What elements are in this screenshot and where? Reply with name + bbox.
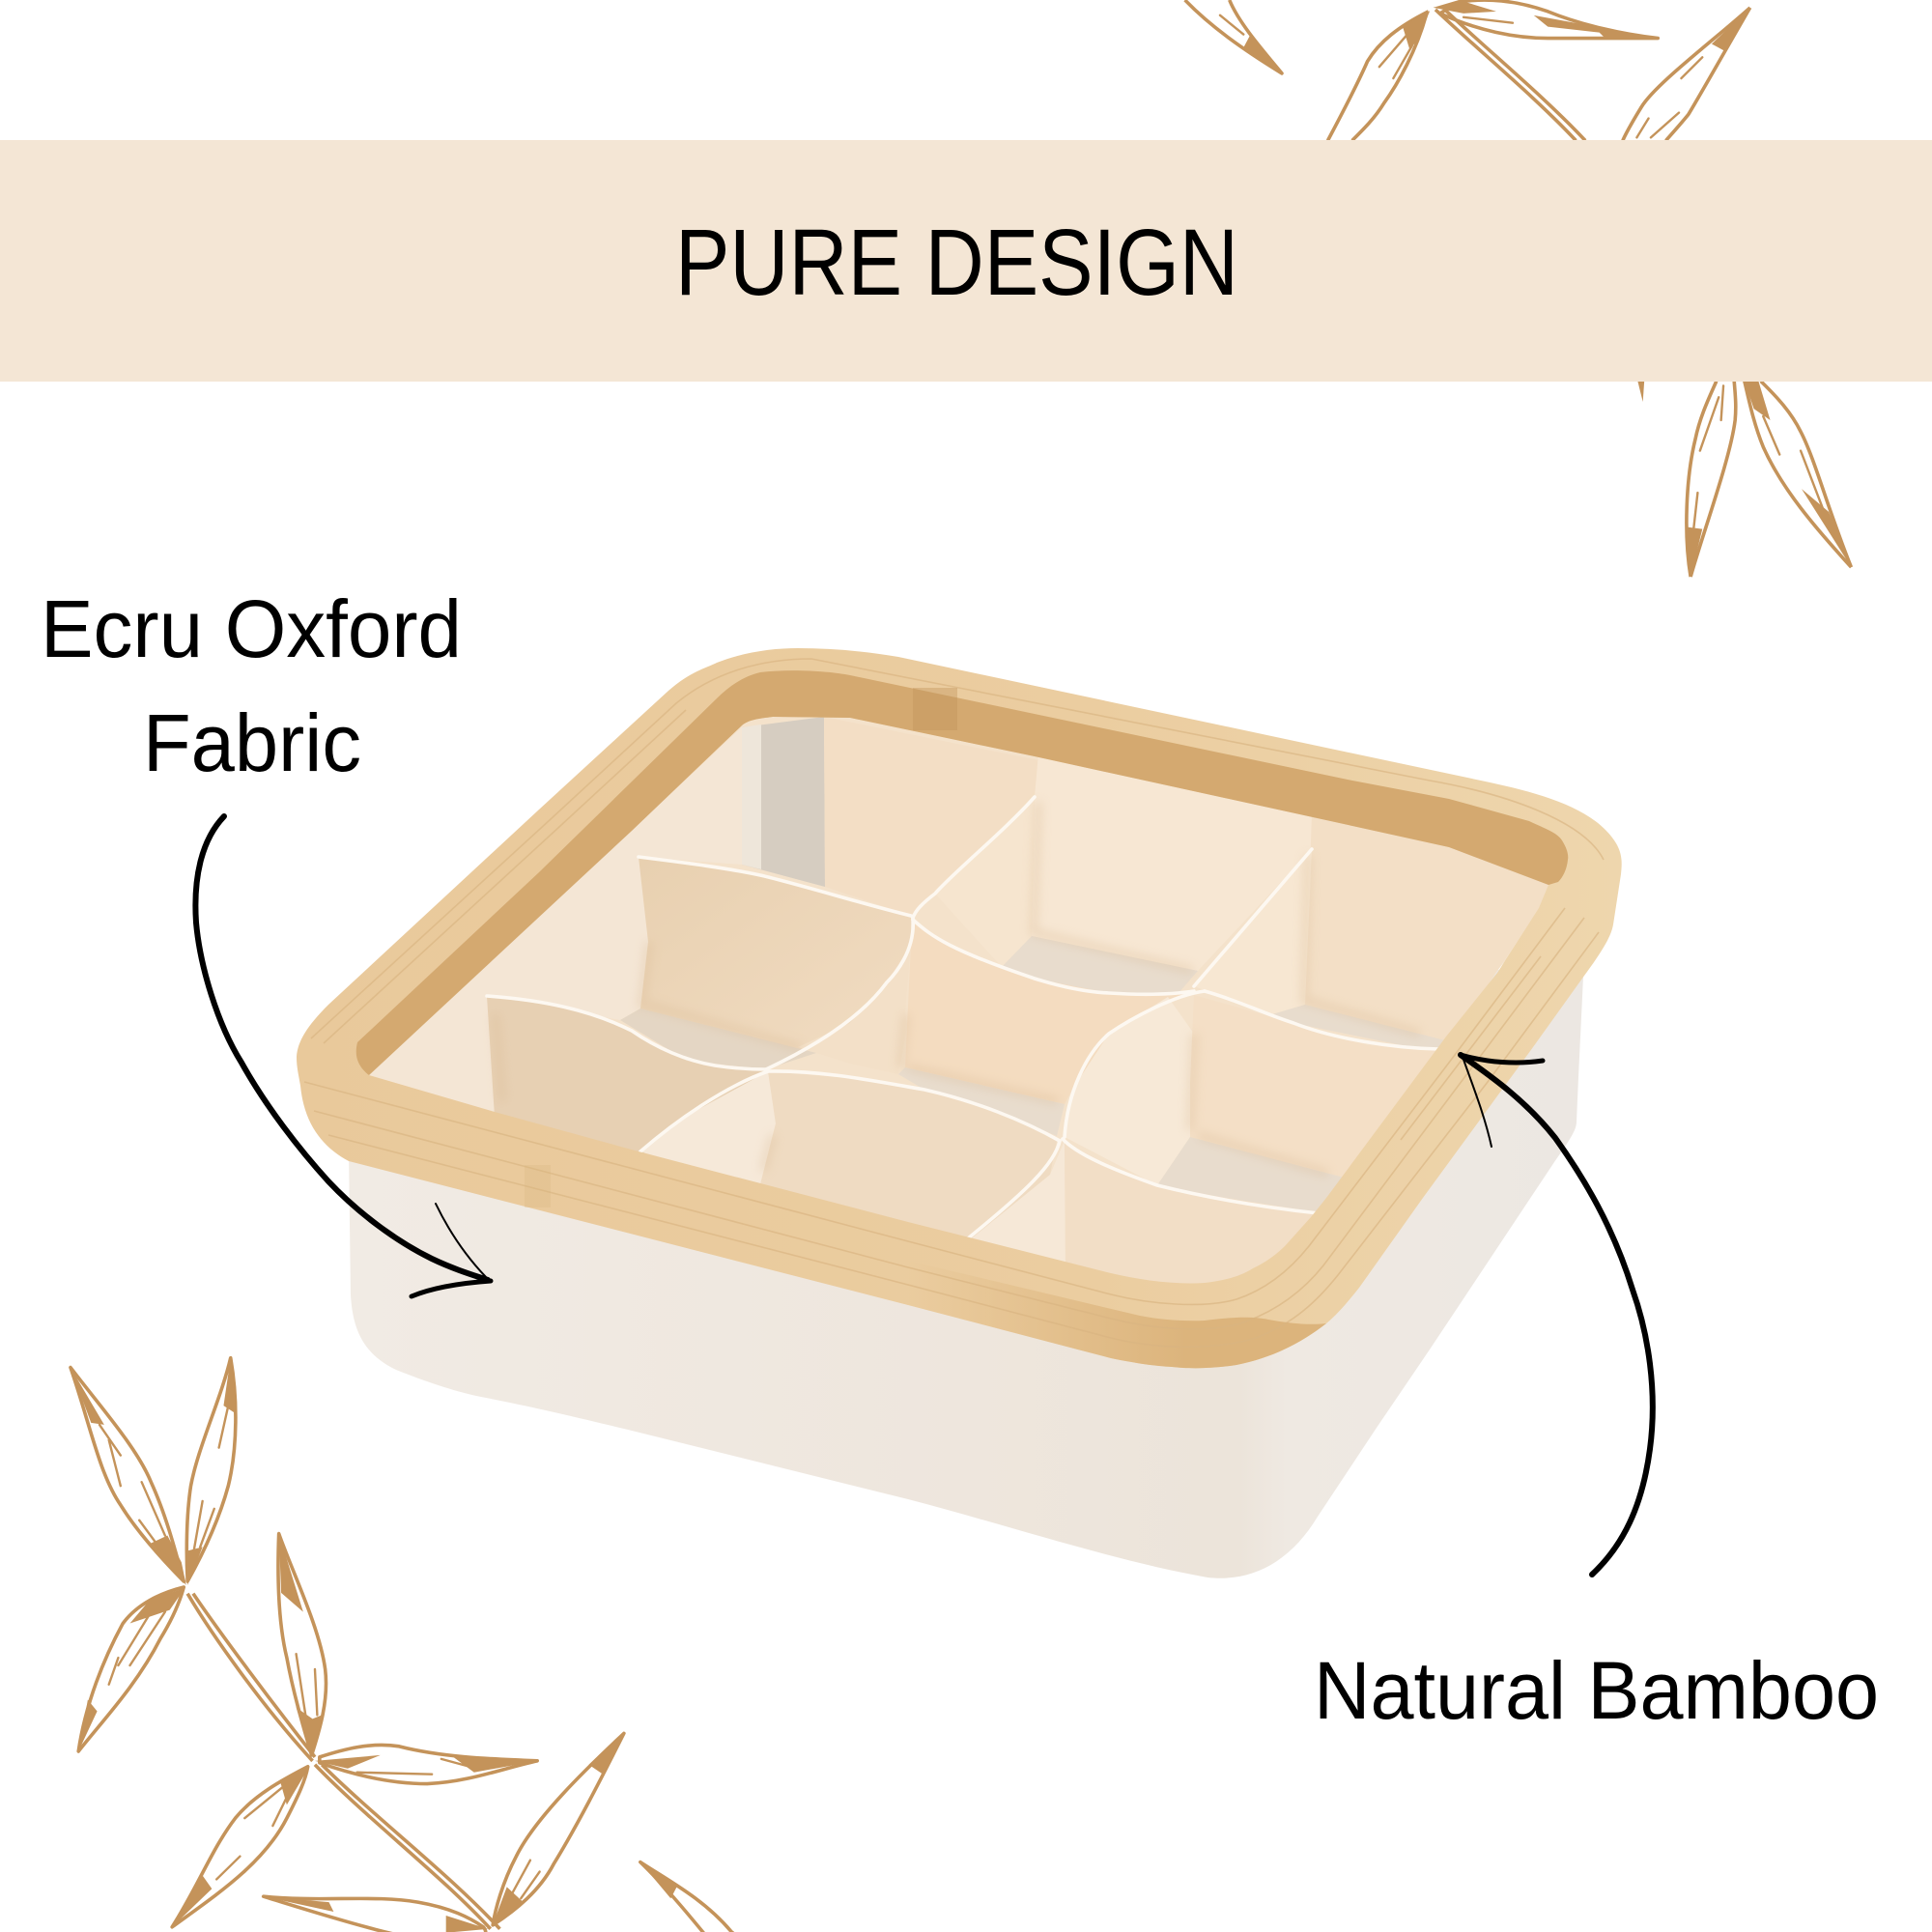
floor back right [1272,1005,1449,1055]
label: Ecru Oxford Fabric [41,583,462,788]
label: Ecru Oxford Fabric: Ecru Oxford [41,583,462,674]
fabric outer body [349,956,1584,1578]
left inner wall [369,727,742,1112]
floor front right [1157,1137,1348,1213]
leaf: bottom [264,1896,488,1932]
leaf: partial top left [1185,0,1282,73]
front small right wall [968,1141,1065,1270]
interior walls and compartments [369,717,1557,1290]
leaf: upper right [186,1358,236,1585]
leaf: centre top [278,1534,327,1757]
leaf: corner tip [640,1862,797,1932]
bamboo illustration: top right [1185,0,1851,577]
stem [187,1594,499,1929]
stem: top [1435,10,1585,141]
frame inner rim [356,670,1568,1075]
front right face [1190,995,1449,1179]
back left panel [824,717,1038,916]
bamboo frame [297,648,1622,1368]
front right left wall [1065,997,1194,1185]
leaf: far right [492,1733,624,1927]
frame grain lines [304,659,1604,1347]
product: fabric and bamboo organizer basket [297,648,1622,1578]
leaf: hanging left [1687,382,1736,577]
upper left compartment right wall [798,945,911,1074]
leaf: top lower left [1327,11,1430,141]
back small left wall [935,797,1035,967]
label: Ecru Oxford Fabric: Fabric [143,697,361,788]
upper left compartment face [639,857,911,1053]
arrow: to bamboo [1461,1055,1653,1575]
front small left wall [640,1071,776,1188]
label: Natural Bamboo: Natural Bamboo [1314,1645,1879,1736]
back small right wall [1194,849,1312,1014]
soft creases [496,802,1420,1174]
leaf: lower left [78,1587,185,1751]
leaf: top far right [1623,8,1750,141]
white seams [487,797,1439,1238]
back centre wall [1032,753,1312,971]
interior base [369,711,1555,1287]
centre face [905,920,1188,1104]
bamboo knot mark [913,688,957,730]
leaf: centre right [315,1745,537,1784]
bottom right face [1065,1141,1333,1290]
floor left [620,1009,816,1069]
frame front darker band [908,1261,1326,1368]
floor centre [898,1067,1065,1136]
title banner [0,140,1932,382]
title: PURE DESIGN [675,210,1238,315]
lower left compartment face [487,996,768,1156]
small leaf tip under banner [1637,382,1644,402]
bamboo knot mark on front [525,1165,551,1208]
bamboo illustration: bottom left [71,1358,797,1932]
leaf: centre lower left [172,1767,309,1927]
arrow: to fabric [195,816,491,1296]
leaf: top right pointing [1434,0,1658,39]
leaf: hanging right [1745,382,1851,567]
back grey flap [742,717,825,887]
front centre compartment face [759,1071,1057,1246]
grey flap light edge [742,724,761,869]
back right wall [1305,814,1557,1043]
leaf: upper left [71,1368,186,1585]
floor back centre [1002,936,1198,993]
